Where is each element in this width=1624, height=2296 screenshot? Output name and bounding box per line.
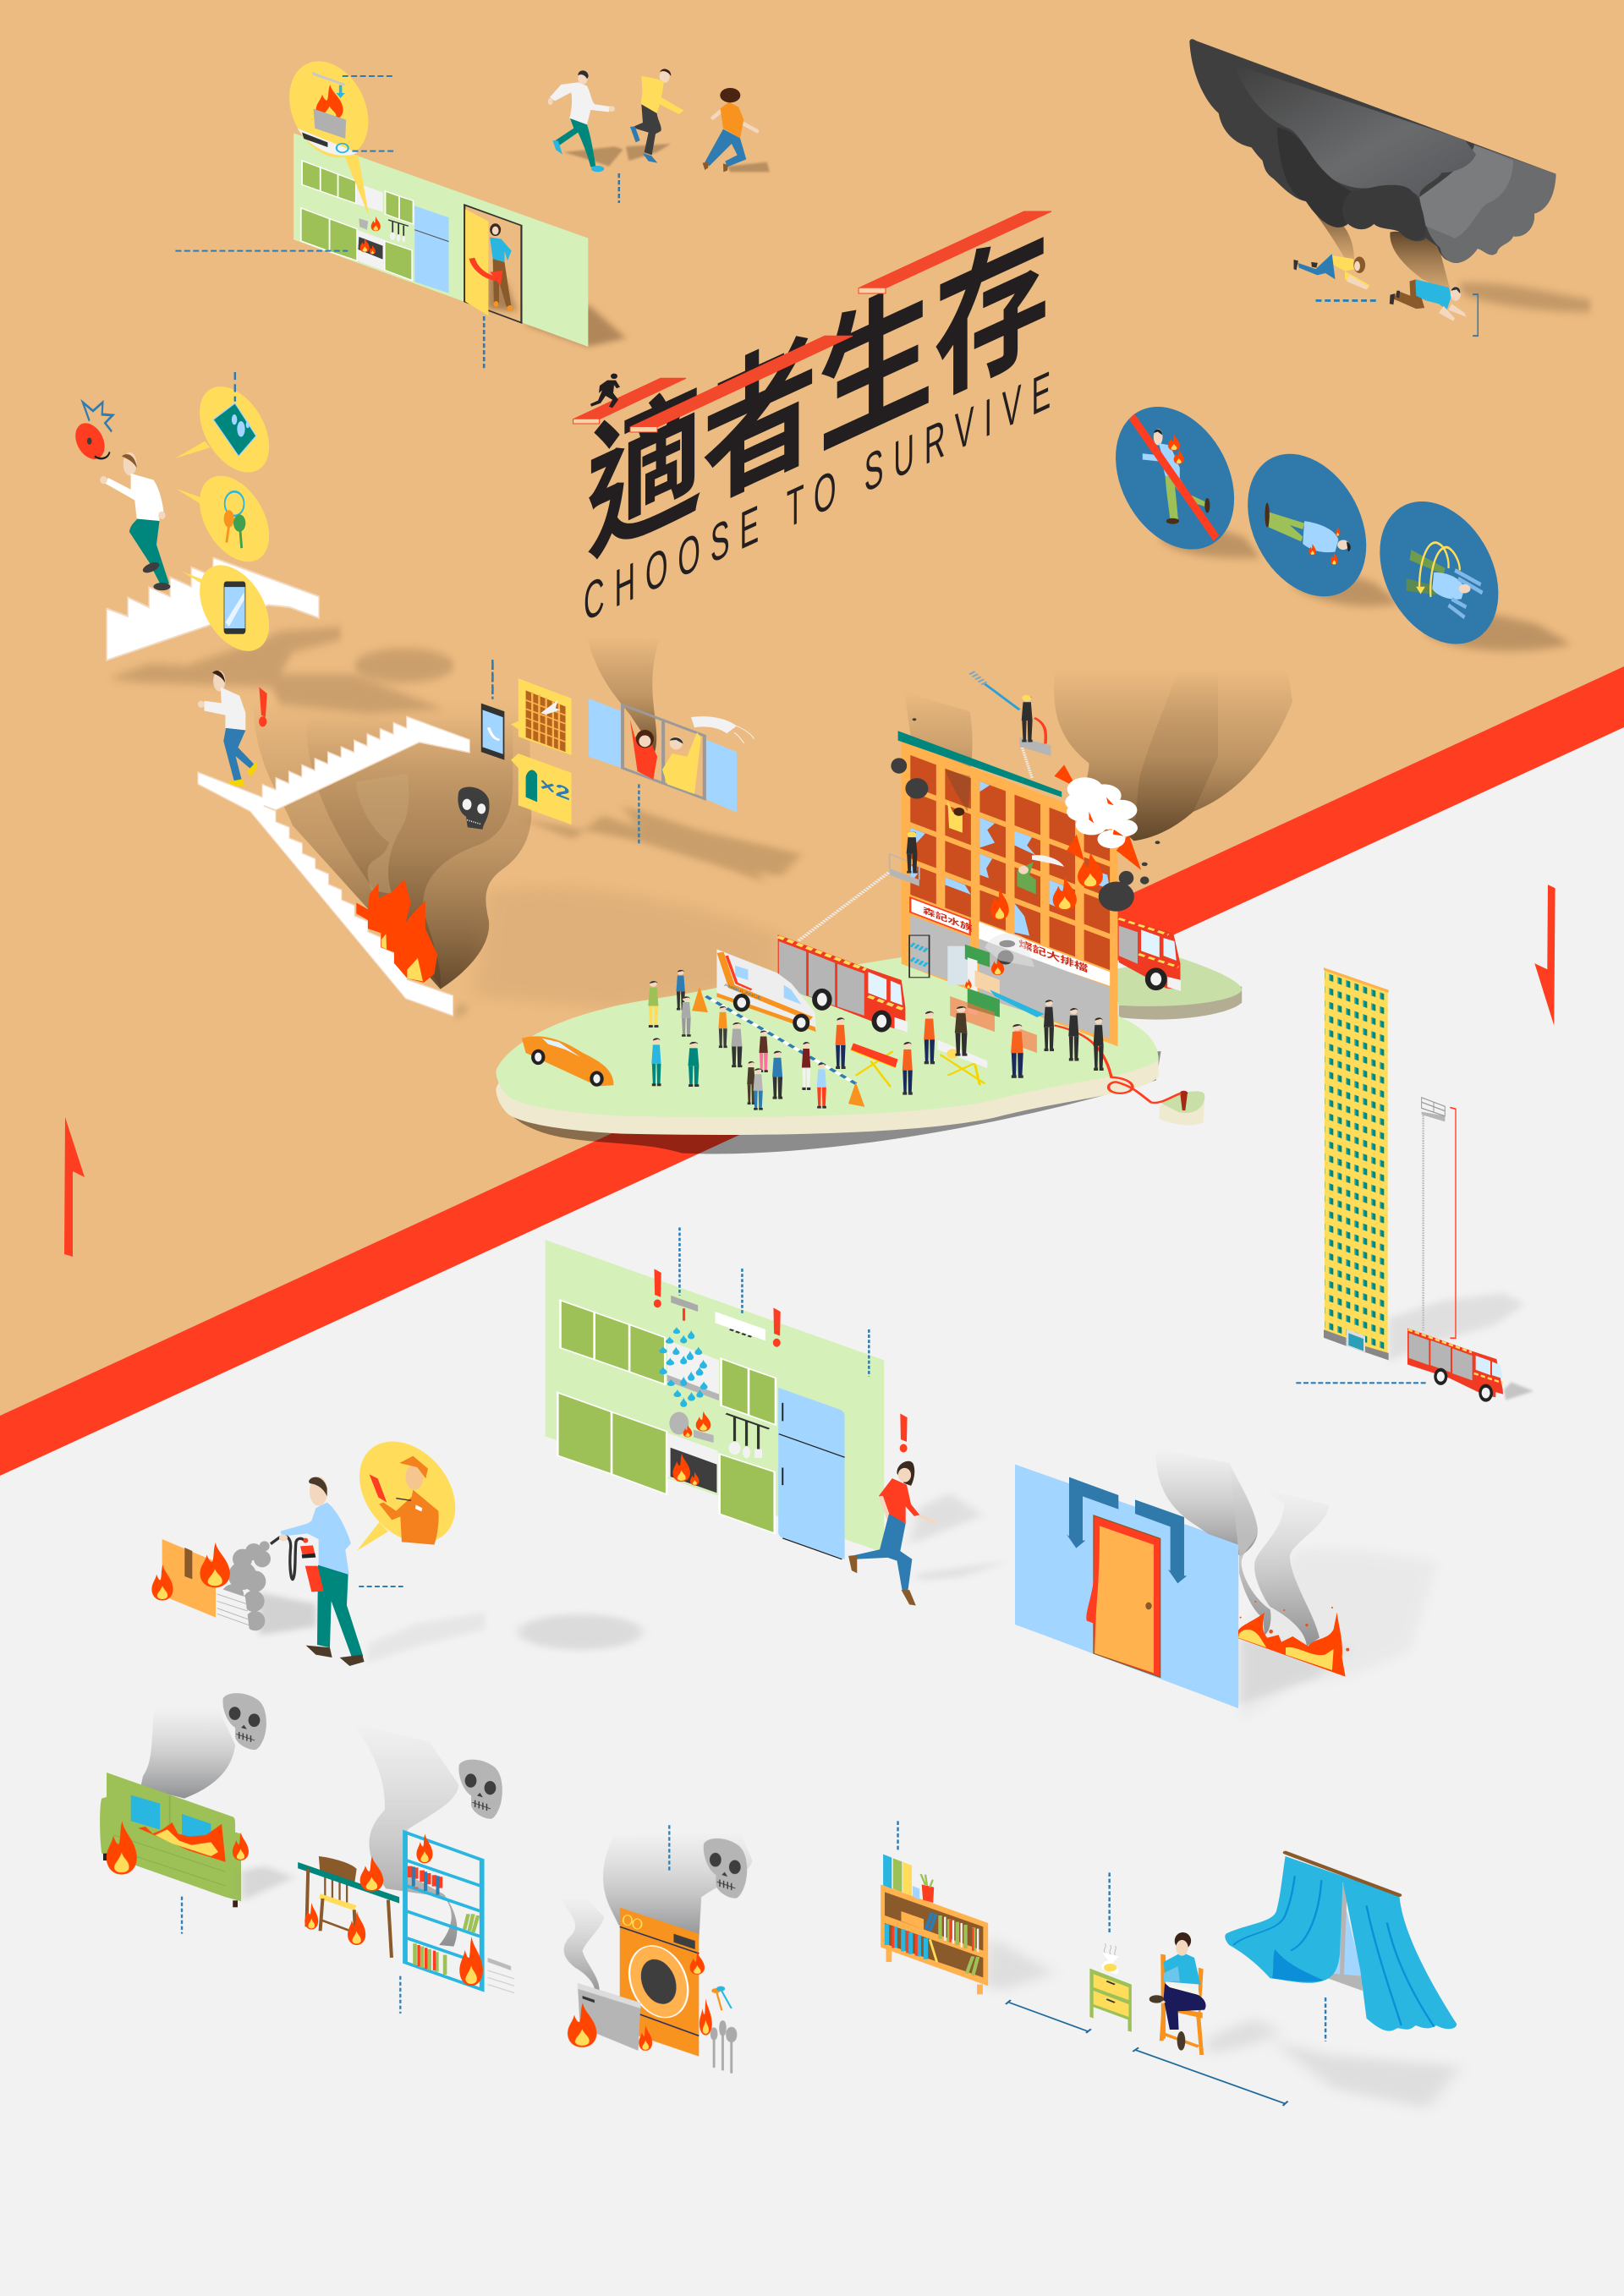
phone icon [481,704,504,760]
oil burner [1101,1943,1118,1975]
oven [667,1433,718,1493]
fire truck [778,934,908,1033]
lower stair [198,716,469,1016]
ladder basket [1422,1098,1445,1121]
smoke shadow on sand [474,886,782,1009]
arrow measure 1 [1006,2000,1091,2033]
person crawling: yellow top [1294,254,1370,289]
orange car [522,1036,613,1087]
callout bubble: stove detail [277,55,381,217]
extinguisher powder cloud [222,1541,271,1630]
ambulance: AMBULANCE [724,983,761,1001]
red arrow: close door [472,258,497,279]
sofa shadow [241,1866,294,1901]
stretchers [851,1040,987,1087]
box [162,1539,216,1618]
washer flames [568,1952,712,2051]
wall [546,1240,884,1553]
lower ladder [798,872,890,940]
door frame [1094,1515,1160,1677]
diagonal red band [0,666,1624,1476]
building windows [910,755,1110,970]
blue wall [1015,1465,1238,1708]
hanging utensils [388,220,409,237]
upper cabinets [561,1301,776,1425]
water drops [659,1327,708,1407]
stair fire [356,879,437,983]
island side [496,975,1159,1135]
height bracket [1450,1108,1456,1338]
red planks across title [573,211,1051,432]
fire truck [1407,1329,1506,1403]
pan box [578,1983,640,2051]
extinguisher with hose [271,1534,324,1592]
upper ladder [1022,747,1032,778]
chair [319,1855,357,1943]
smoke alarm [716,1312,765,1340]
exclamation mark [259,687,267,726]
person: white shirt [548,70,615,172]
dashed leader [1316,298,1379,303]
flames along floor [1238,1613,1346,1677]
cutlery [711,2021,736,2074]
door panel shadow [1238,1639,1349,1705]
floor shadows [981,1937,1461,2108]
shop sign left [910,897,973,934]
dashed leaders [182,1825,669,2014]
disc: do not run when on fire [1094,377,1256,578]
cooker hood [667,1340,719,1400]
yellow card: two persons [511,753,572,825]
panel: kitchen with sprinkler [518,1227,1349,1705]
sofa flames [107,1821,249,1875]
bell [71,403,112,467]
dashed leaders [679,1227,869,1377]
panel: alarm, stairs up and emergency items [71,369,531,1019]
floor shadow blob [518,1614,642,1650]
truck shadow [1504,1383,1533,1400]
panel: tower block and aerial ladder [1296,885,1555,1403]
person crawling: blue top [1390,279,1466,321]
barrier tape [706,996,857,1084]
smoke: washing machine [603,1833,752,1939]
running woman shadow [909,1493,1009,1581]
disc: roll on the ground [1358,472,1521,673]
island top [496,957,1159,1117]
white towel waving [1032,855,1064,867]
dashed leader [235,372,492,699]
person: yellow shirt [630,68,683,163]
building flames [965,852,1103,989]
fridge [414,205,449,293]
smoke: desk and bookshelf [352,1723,458,1947]
arrows around door [1067,1477,1187,1583]
shelf flames [416,1833,483,1986]
woman in doorway [490,223,513,311]
stove top fire [669,1411,714,1443]
hydrant islet [1160,1091,1204,1126]
dashed leader [359,1584,403,1589]
people at window shadowed panel: windows [589,699,754,813]
back island [1109,957,1242,1020]
box flames [151,1543,230,1601]
shop front left [909,915,970,987]
arrow measure 2 [1133,2047,1288,2106]
window panel shadow [521,805,801,883]
bookshelf [405,1833,482,1990]
upper stair [107,557,319,660]
market stall [950,945,1045,1053]
smoke cloud light [1419,145,1556,263]
lower cabinets [301,208,412,281]
smoke stems [1308,204,1354,260]
drawer unit [1089,1969,1132,2032]
blue door wall [1016,1465,1238,1705]
panel: safe room layout [881,1821,1461,2108]
smoke: behind building [1054,669,1292,841]
utensil rail [726,1414,769,1458]
ground shadow [1389,1293,1525,1361]
sparks [1240,1601,1349,1652]
paper stack [216,1587,250,1630]
desk [298,1862,399,1958]
hose [1054,1025,1181,1103]
panel: black smoke layer with crawling people [1094,39,1590,673]
smoke: sofa [140,1708,235,1799]
panel: three running people [548,68,770,172]
smoke stem dark [1229,1463,1271,1635]
shop sign right: 燦記大排檔 [1018,937,1088,975]
keys [711,1986,732,2010]
floor shadows [260,1592,485,1663]
open door [465,209,488,315]
seated person on stool [1149,1932,1206,2055]
firefighter in upper basket [970,671,1051,756]
roof band [898,731,1062,797]
back fire truck [1119,917,1181,991]
sofa [100,1773,241,1907]
smoke cloud gradient [1233,64,1476,197]
washing machine [620,1908,699,2057]
building facade [902,741,1118,1046]
man going downstairs [198,671,257,786]
smoke plume right [1254,1488,1330,1647]
skull desk [458,1760,502,1819]
background: sand panel [0,0,1624,1416]
red arrow down [1534,885,1555,1026]
curtain rail [1286,1853,1399,1895]
island cast shadow [508,1051,1161,1153]
debris smoke puffs [891,718,1160,965]
door [1095,1526,1154,1673]
subtitle: CHOOSE TO SURVIVE [584,359,1051,633]
person: orange shirt [703,88,757,172]
cooker hood [357,184,382,212]
oven [357,230,384,271]
ambulance [716,950,816,1032]
newspaper stack [488,1958,516,2002]
running woman [848,1461,936,1605]
shop sign left: 森記水族 [923,905,973,934]
bookcase [881,1884,988,1994]
traffic cones [692,987,864,1107]
panel: top kitchen scene [175,55,626,370]
smoke: pan [560,1897,604,1994]
bubble: keys [176,458,280,579]
ladder [1420,1115,1427,1330]
shop sign right [979,922,1110,986]
doorway [464,205,521,323]
disc: drop to the ground [1226,425,1389,626]
panel: big island rescue scene [474,637,1292,1153]
floor shadow [1241,1549,1438,1719]
bubble: wet towel [175,369,280,490]
smoke over shop [985,934,1034,967]
dashed leaders [175,76,619,370]
panel: smoke and burning furniture [100,1693,752,2074]
crowd and responders [648,970,1104,1110]
stair shadows [108,627,470,1019]
smoke cloud dark [1189,39,1556,263]
door closer red bend [1086,1522,1100,1624]
bubble: fire safety inspector [340,1422,475,1561]
shadows under discs [1157,529,1572,651]
height bracket [1473,294,1478,336]
left red arrow [64,1117,85,1257]
exclamation marks [654,1269,908,1452]
fridge [778,1388,845,1559]
dashed leaders [492,660,639,846]
window behind curtain [1321,1880,1363,1991]
man going upstairs [100,452,170,590]
lower cabinets [557,1393,775,1533]
smoke over facade [945,770,970,812]
skull sofa [222,1693,266,1750]
tower [1324,967,1389,1360]
trapped person yellow [947,800,964,833]
shadow [1458,282,1590,312]
firefighter in lower basket [890,831,919,886]
binders and pencil cup [883,1855,934,1903]
icon: running figure [590,374,620,408]
curtain [1225,1856,1457,2031]
skull washer [704,1838,747,1899]
bubble: phone [182,547,280,669]
broken glass [910,781,1110,935]
dashed leaders [898,1821,1325,2041]
yellow card: two persons: ×2 [540,774,570,804]
upper cabinets [302,161,413,224]
sprinkler [671,1296,698,1321]
desk flames [304,1856,383,1945]
shop front right [979,939,1110,1039]
yellow card: window grid [511,678,572,755]
person [281,1477,365,1666]
dark skull [458,787,490,830]
explosion [1054,764,1141,870]
panel: fire door with smoke [1015,1449,1438,1719]
smoke plume left [1156,1449,1258,1556]
panel: person using extinguisher [151,1422,485,1666]
title: chinese heading: 適者生存 [586,172,1050,594]
panel: title [573,172,1051,633]
dashed leader [1296,1381,1427,1385]
smoke behind lower stair [253,700,531,989]
trapped person green [1017,862,1036,894]
stove flame [371,216,381,231]
